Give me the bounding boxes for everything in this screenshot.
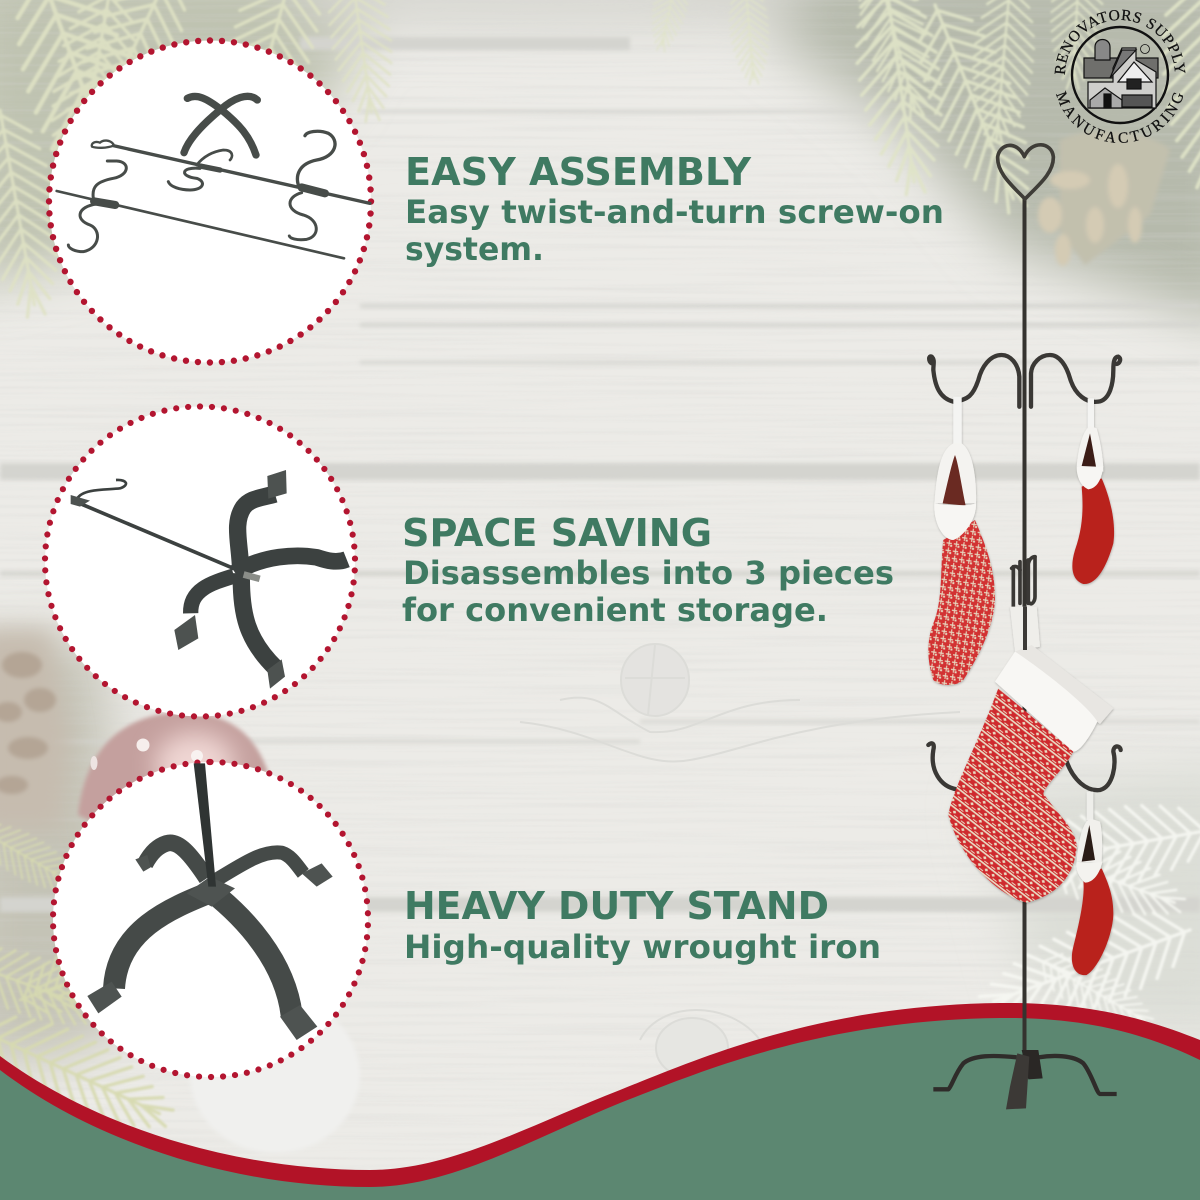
bottom left pinecone — [0, 630, 70, 830]
heading: EASY ASSEMBLY — [405, 150, 751, 194]
lower hooks and stockings — [928, 607, 1121, 1109]
text block: easy assembly: system. — [405, 230, 544, 268]
red ornament — [78, 712, 360, 1153]
text block: heavy duty stand: High-quality wrought iron — [404, 928, 881, 966]
plank gaps — [0, 37, 1200, 912]
logo: Renovators Supply Manufacturing: MANUFACTURING — [1056, 90, 1183, 143]
stand pole — [1022, 197, 1026, 1062]
text block: space saving: for convenient storage. — [402, 591, 828, 629]
stand base — [933, 1050, 1117, 1109]
top left branches — [0, 0, 402, 322]
knots — [520, 644, 960, 1078]
stocking: large knit — [948, 607, 1113, 903]
product: stocking stand — [928, 145, 1121, 1109]
text block: space saving — [402, 511, 894, 629]
icon: heart top — [998, 145, 1053, 199]
centre connector hooks — [1012, 557, 1035, 614]
text block: heavy duty stand — [404, 884, 881, 966]
upper hooks — [929, 355, 1120, 407]
lower hooks — [928, 743, 1121, 790]
logo: Renovators Supply Manufacturing — [1054, 10, 1186, 143]
icon: disassembled rods, hooks and base — [57, 96, 370, 258]
stocking: lower right red — [1072, 792, 1113, 975]
panel: easy assembly image circle — [49, 40, 371, 362]
upper hooks and stockings — [928, 355, 1120, 685]
bottom left branches — [0, 812, 185, 1153]
heading: SPACE SAVING — [402, 511, 712, 555]
panel: space saving image circle — [45, 406, 355, 716]
icon: four-leg stand — [87, 763, 333, 1040]
heading: HEAVY DUTY STAND — [404, 884, 829, 928]
panel: heavy duty stand image circle — [53, 762, 368, 1077]
bottom wave: red band and green band — [0, 1003, 1200, 1200]
stocking: upper left knit — [928, 397, 995, 685]
logo: Renovators Supply Manufacturing: RENOVATORS SUPPLY — [1054, 10, 1186, 75]
text block: easy assembly: Easy twist-and-turn screw-on — [405, 193, 944, 231]
text block: space saving: Disassembles into 3 pieces — [403, 554, 894, 592]
stocking: upper right red — [1072, 398, 1114, 584]
icon: base bracket with rod — [71, 470, 347, 689]
icon: house — [1084, 40, 1158, 108]
text block: easy assembly — [405, 150, 944, 268]
top right pinecone — [1038, 131, 1170, 266]
bottom right branches — [969, 793, 1200, 1044]
top right branches — [644, 0, 1200, 224]
